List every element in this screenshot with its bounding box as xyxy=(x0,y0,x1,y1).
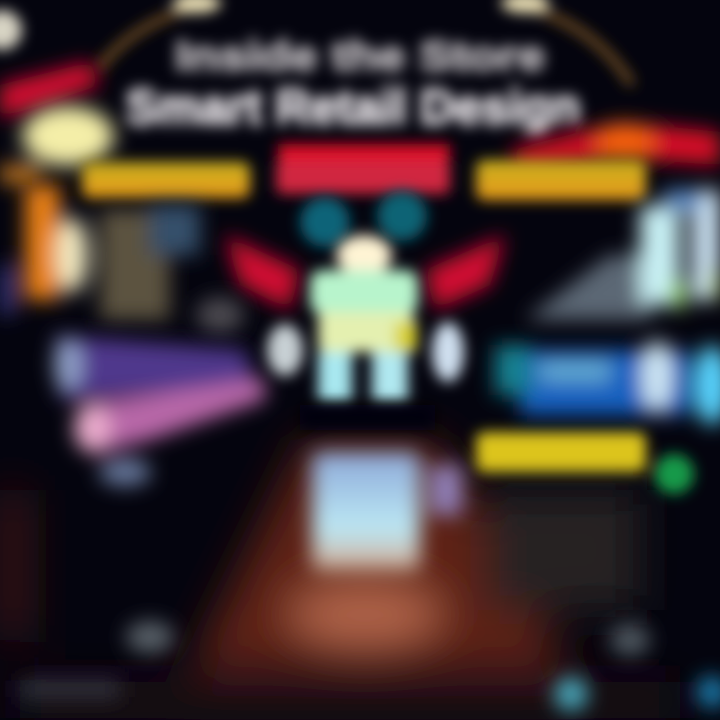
right blue panel xyxy=(495,340,720,425)
title: Inside the Store xyxy=(175,32,545,79)
yellow label lower right xyxy=(476,432,646,472)
yellow label right xyxy=(476,160,646,200)
left spotlight xyxy=(0,106,114,183)
left column xyxy=(0,185,244,333)
left purple panel xyxy=(54,335,265,486)
yellow label left xyxy=(82,162,250,198)
red label centre xyxy=(276,144,450,194)
title xyxy=(126,32,580,135)
red ribbons xyxy=(0,62,720,310)
floor reflection xyxy=(312,452,462,570)
central figure xyxy=(267,235,464,402)
bottom icons xyxy=(20,621,720,711)
teal glasses xyxy=(300,191,427,247)
right panel xyxy=(525,190,720,320)
title: Smart Retail Design xyxy=(126,79,580,135)
title arc xyxy=(0,0,632,85)
base shadow xyxy=(300,405,435,430)
floor xyxy=(0,440,680,720)
heading bars xyxy=(82,144,694,494)
green badge xyxy=(654,454,694,494)
